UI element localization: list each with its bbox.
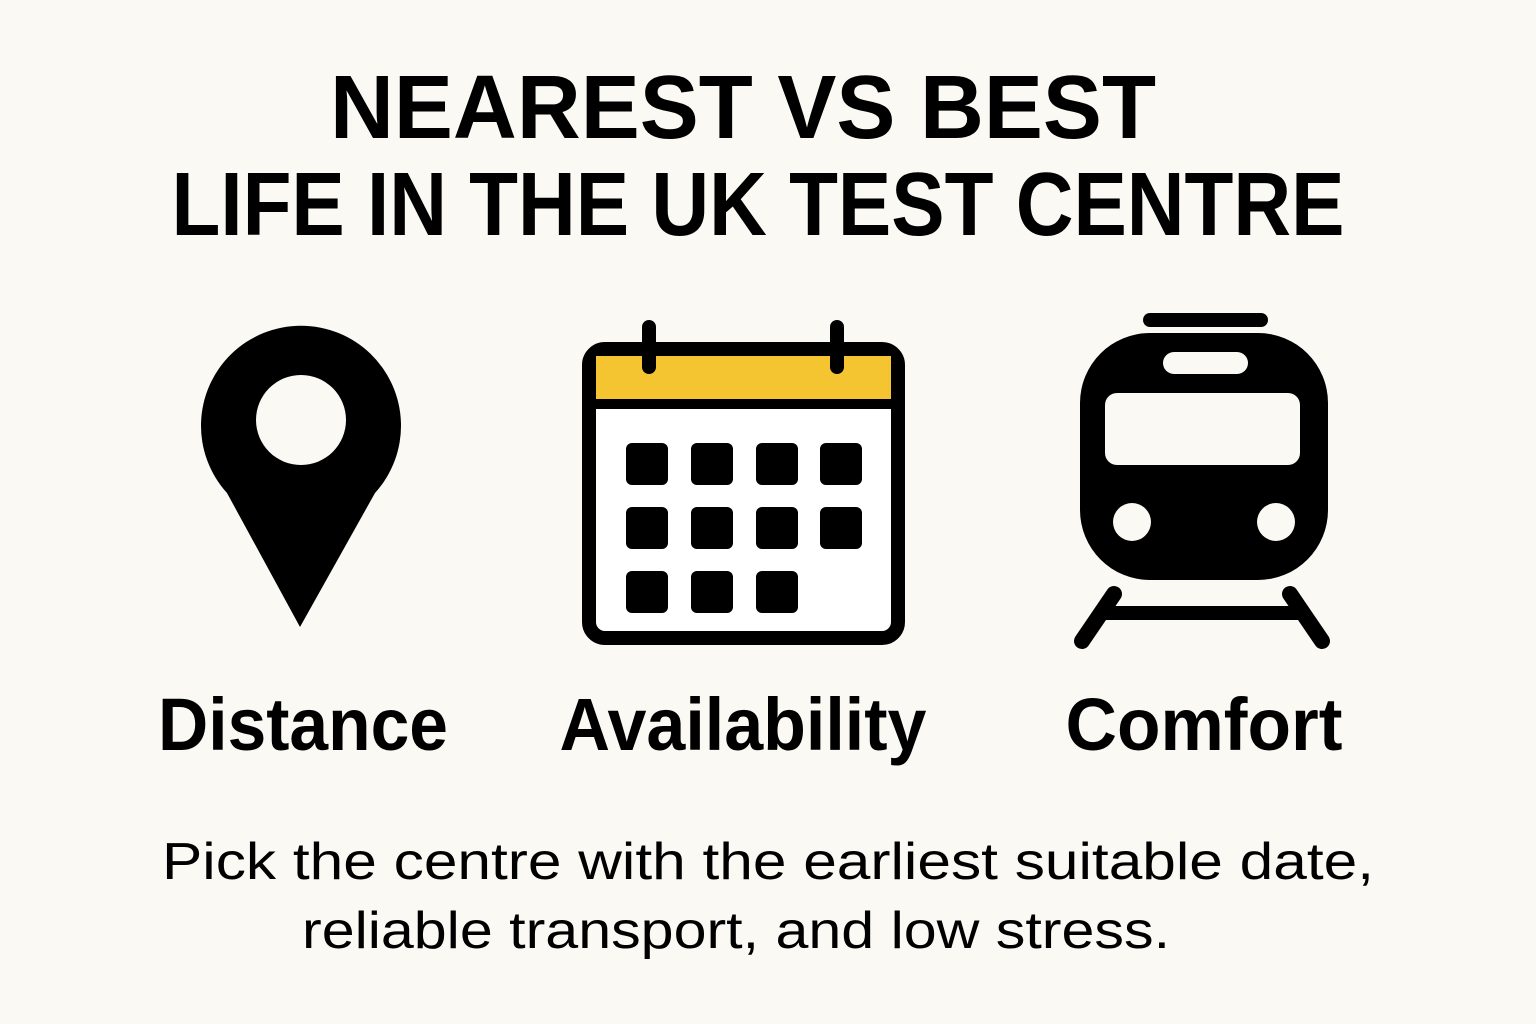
text block: advice: reliable transport, and low stress. — [302, 902, 1170, 960]
icon: calendar — [589, 320, 898, 638]
label: Distance: Distance — [158, 683, 448, 766]
text block: advice — [162, 833, 1374, 960]
icon: location pin — [201, 326, 401, 627]
label: Comfort: Comfort — [1066, 683, 1342, 766]
text block: advice: Pick the centre with the earliest suitable date, — [162, 833, 1374, 891]
label: Availability: Availability — [560, 683, 926, 766]
title: LIFE IN THE UK TEST CENTRE — [172, 155, 1344, 255]
icon: train — [1080, 313, 1328, 641]
title — [172, 58, 1344, 255]
title: NEAREST VS BEST — [330, 58, 1156, 158]
